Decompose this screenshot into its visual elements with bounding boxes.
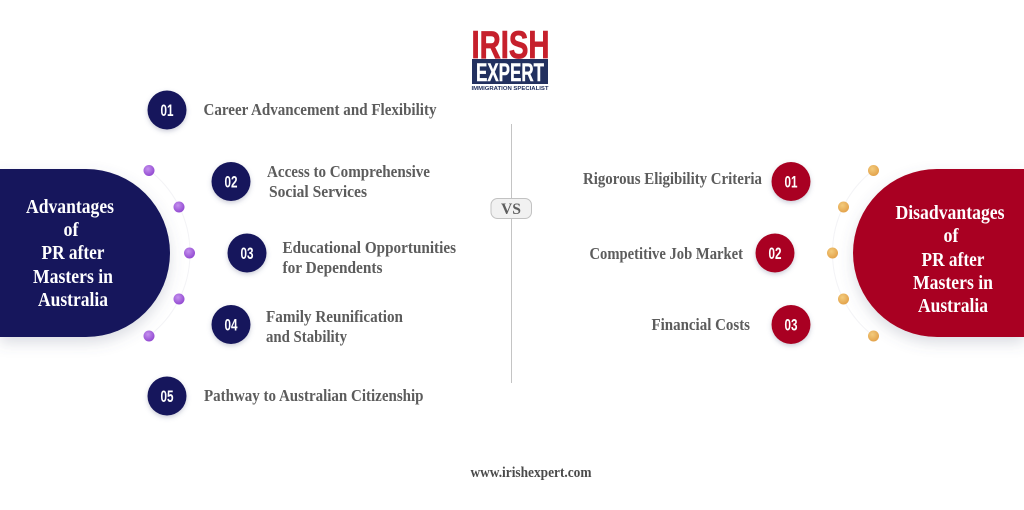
advantage 03: Educational Opportunities xyxy=(282,238,456,257)
disadvantage 03: Financial Costs xyxy=(652,315,750,334)
disadvantage 01: 01 xyxy=(784,172,798,192)
advantage 03 xyxy=(228,234,456,277)
advantage 04: 04 xyxy=(224,316,238,334)
VS badge xyxy=(491,198,532,218)
decorative arc with purple dots xyxy=(144,165,195,342)
advantage 04 xyxy=(212,305,403,346)
VS badge: VS xyxy=(501,201,521,218)
disadvantages heading: PR after xyxy=(922,249,984,271)
logo: Irish Expert: IRISH xyxy=(472,24,550,67)
disadvantage 03: 03 xyxy=(784,316,798,334)
logo: Irish Expert xyxy=(472,24,550,92)
disadvantages heading: Australia xyxy=(918,295,988,317)
advantage 03: 03 xyxy=(240,244,254,263)
advantage 01: Career Advancement and Flexibility xyxy=(204,100,437,119)
advantages heading: Advantages xyxy=(26,196,114,218)
advantage 03: for Dependents xyxy=(282,258,383,277)
panel: advantages xyxy=(0,169,170,337)
advantage 05 xyxy=(148,376,424,416)
advantage 02 xyxy=(212,162,430,201)
logo: Irish Expert: IMMIGRATION SPECIALIST xyxy=(472,86,549,92)
advantage 04: Family Reunification xyxy=(266,307,403,326)
divider line xyxy=(510,124,512,383)
disadvantage 03 xyxy=(652,305,810,344)
advantages heading xyxy=(26,196,114,311)
advantage 02: Social Services xyxy=(269,182,367,201)
advantages heading: of xyxy=(64,219,80,241)
disadvantages heading: Disadvantages xyxy=(896,202,1005,224)
advantage 04: and Stability xyxy=(266,327,347,346)
advantage 02: 02 xyxy=(224,172,238,192)
disadvantage 02 xyxy=(590,234,794,272)
disadvantages heading: Masters in xyxy=(913,272,994,294)
disadvantage 02: 02 xyxy=(768,244,782,263)
advantage 01: 01 xyxy=(160,101,174,120)
decorative arc with gold dots xyxy=(827,165,879,342)
advantage 05: 05 xyxy=(160,387,174,406)
disadvantage 01: Rigorous Eligibility Criteria xyxy=(583,169,762,188)
advantages heading: Masters in xyxy=(33,266,114,288)
logo: Irish Expert: EXPERT xyxy=(476,59,544,87)
advantage 05: Pathway to Australian Citizenship xyxy=(204,386,424,405)
advantage 01 xyxy=(148,90,437,130)
website footer: www.irishexpert.com xyxy=(470,465,592,481)
disadvantages heading xyxy=(896,202,1005,317)
disadvantage 02: Competitive Job Market xyxy=(590,244,743,263)
advantages heading: Australia xyxy=(38,289,108,311)
advantages heading: PR after xyxy=(42,242,104,264)
advantage 02: Access to Comprehensive xyxy=(267,162,430,181)
disadvantages heading: of xyxy=(944,225,960,247)
panel: disadvantages xyxy=(853,169,1024,337)
disadvantage 01 xyxy=(583,162,810,201)
